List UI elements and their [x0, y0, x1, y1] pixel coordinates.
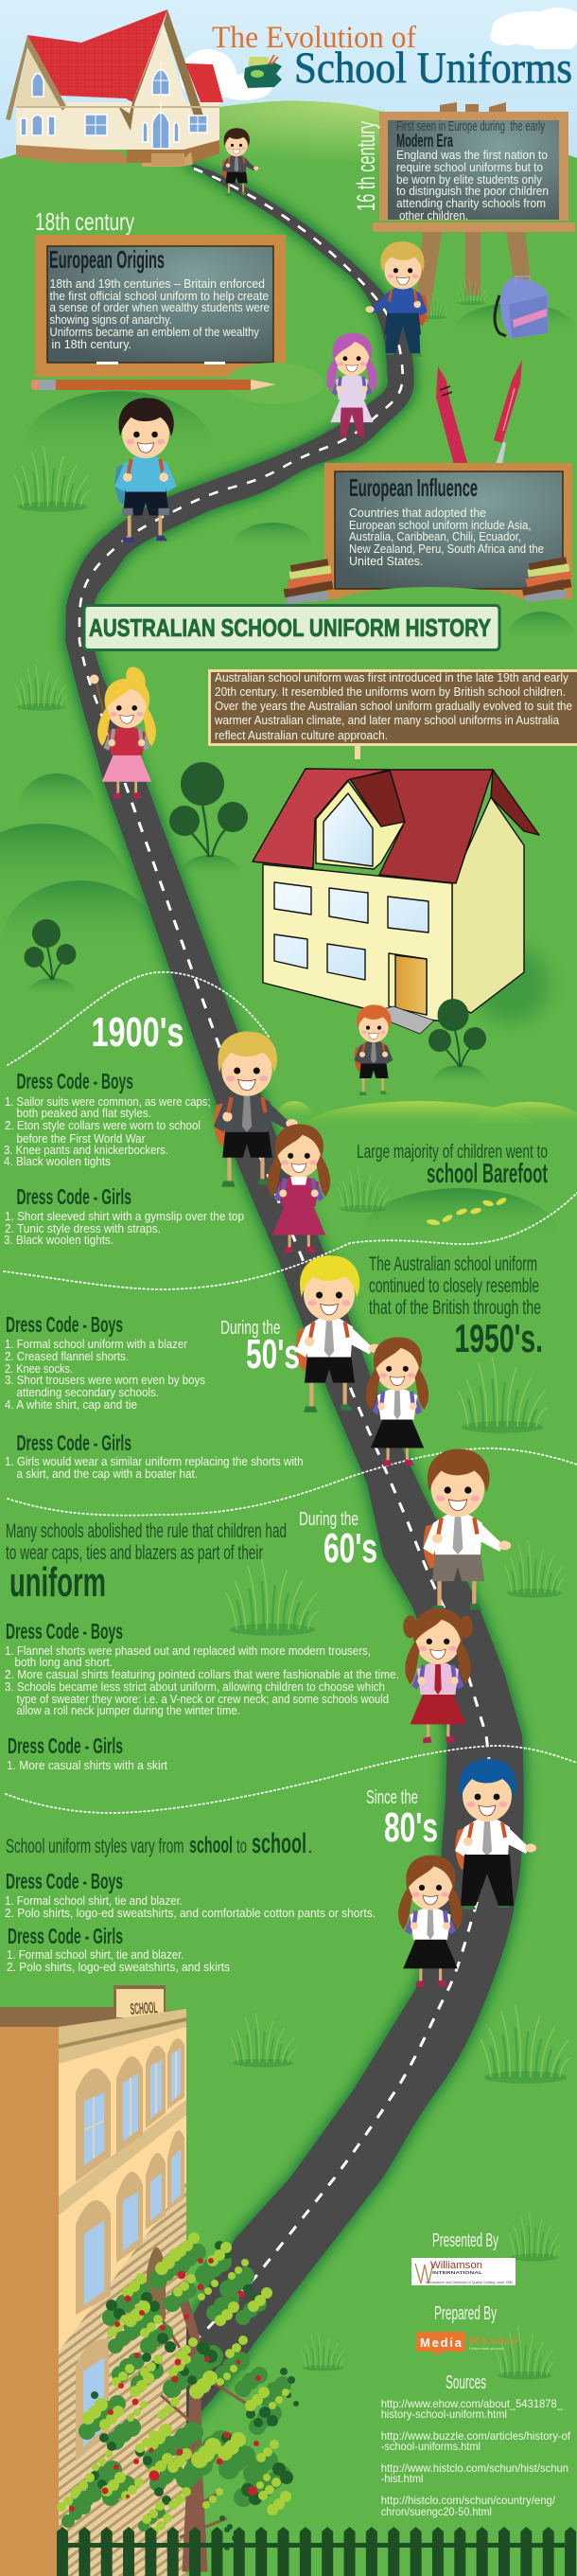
right wall: [452, 797, 524, 1013]
heading: Dress Code - Boys: [6, 1869, 123, 1893]
1900s girls dress code: [4, 1184, 244, 1247]
easel clips: [440, 102, 506, 112]
prepared by: Prepared By: [434, 2303, 497, 2324]
1980s boys dress code: [5, 1869, 376, 1920]
hills: [0, 303, 577, 1283]
list: 2. More casual shirts featuring pointed collars that were fashionable at the time.: [5, 1668, 399, 1681]
era 60s: [299, 1509, 377, 1572]
list: 3. Short trousers were worn even by boys: [5, 1374, 205, 1387]
red apples: [69, 2258, 261, 2512]
heading: Dress Code - Boys: [17, 1069, 133, 1093]
picket fence: [57, 2527, 577, 2576]
list: [4, 1210, 244, 1247]
side wall: [0, 2027, 59, 2576]
list: type of sweater they wore: i.e. a V-neck or crew neck; and some schools would: [17, 1693, 389, 1706]
era 60s: During the: [299, 1509, 358, 1530]
era 80s: [366, 1787, 438, 1851]
board text: New Zealand, Peru, South Africa and the: [349, 542, 544, 556]
windows lower row: [76, 2247, 166, 2461]
hill crest highlight: [189, 101, 577, 170]
logo: media mosaic: Media: [420, 2336, 463, 2350]
1980s callout: .: [307, 1836, 313, 1857]
sources list: chron/suengc20-50.html: [381, 2505, 492, 2518]
board heading: European Origins: [49, 245, 165, 274]
school house at top: [6, 9, 223, 167]
windows middle row: [76, 2130, 184, 2315]
board text: the first official school uniform to help create: [49, 290, 269, 303]
era 50s: During the: [220, 1318, 280, 1339]
era 50s: 50's: [246, 1331, 300, 1377]
dotted era divider lines: [4, 972, 577, 1813]
list: 1. Formal school shirt, tie and blazer.: [5, 1894, 183, 1908]
kid: small boy on path: [222, 128, 258, 196]
board text: Modern Era: [396, 132, 453, 151]
board text: European school uniform include Asia,: [349, 519, 532, 532]
board text: 18th and 19th centuries – Britain enforced: [49, 277, 265, 291]
icon: books right: [522, 557, 571, 602]
floor band: [59, 2100, 186, 2215]
sky background: [0, 0, 577, 180]
1960s boys dress code: [5, 1619, 399, 1717]
roof strip: [0, 2007, 186, 2027]
mound over board base: [331, 587, 530, 625]
sources list: history-school-uniform.html: [381, 2407, 507, 2421]
heading: Dress Code - Girls: [8, 1924, 123, 1948]
right roof: [379, 770, 493, 883]
1960s girls dress code: [7, 1733, 167, 1772]
logo: williamson international: Manufacturer and Distributor of Quality Clothing, since 1980: [426, 2281, 513, 2284]
1980s callout: School uniform styles vary from: [6, 1836, 184, 1857]
list item: 1. More casual shirts with a skirt: [7, 1759, 167, 1772]
list: [5, 1338, 205, 1412]
road shadow: [57, 161, 524, 2480]
1980s callout: school: [189, 1833, 233, 1858]
board heading: European Influence: [349, 473, 478, 502]
school sign: [114, 1985, 166, 2018]
icon: tree three: [428, 999, 486, 1067]
list: before the First World War: [17, 1132, 146, 1146]
icon: pencil: [31, 380, 276, 390]
1900s boys dress code: [4, 1069, 211, 1168]
board text: [396, 118, 549, 222]
1980s callout: school: [252, 1828, 306, 1859]
school sign: SCHOOL: [130, 1999, 158, 2018]
sources list: http://www.buzzle.com/articles/history-of: [381, 2429, 571, 2443]
icon: red pen: [494, 360, 522, 464]
list: 2. Polo shirts, logo-ed sweatshirts, and comfortable cotton pants or shorts.: [5, 1907, 376, 1920]
kid: girl waving with yellow hair: [90, 667, 156, 799]
list: [4, 1095, 211, 1168]
board frame: [324, 463, 572, 599]
list: 1. Formal school uniform with a blazer: [5, 1338, 187, 1351]
heading: Dress Code - Girls: [8, 1733, 123, 1758]
board text: other children.: [399, 209, 468, 222]
icon: backpack on hill: [495, 276, 549, 339]
era 60s: 60's: [323, 1525, 377, 1572]
kid: yellow hair boy in white shirt: [296, 1255, 380, 1412]
list: 3. Knee pants and knickerbockers.: [4, 1144, 168, 1157]
panel: australian history note: 20th century. It resembled the uniforms worn by British school children.: [215, 685, 566, 699]
board text: a sense of order when wealthy students were: [49, 301, 270, 314]
list: 2. Knee socks.: [5, 1362, 73, 1376]
list: 2. Creased flannel shorts.: [5, 1350, 129, 1363]
door: [389, 953, 427, 1015]
list: [5, 1455, 304, 1481]
list: 4. Black woolen tights: [4, 1155, 111, 1168]
list: 1. Girls would wear a similar uniform replacing the shorts with: [5, 1455, 304, 1468]
list: [7, 1948, 230, 1974]
easel legs: [414, 232, 532, 322]
logo: media mosaic: Differentiate yourself: [469, 2347, 503, 2351]
board frame: [379, 112, 568, 221]
logo: williamson international: Williamson: [430, 2260, 482, 2271]
cornice: [59, 2009, 186, 2064]
1960s callout: Many schools abolished the rule that children had: [6, 1520, 287, 1542]
list: 1. Flannel shorts were phased out and replaced with more modern trousers,: [5, 1644, 371, 1658]
road: [57, 161, 524, 2480]
list: 3. Schools became less strict about uniform, allowing children to choose which: [5, 1680, 385, 1694]
board text: attending charity schools from: [396, 197, 546, 210]
panel: modern era easel: [373, 102, 575, 322]
board text: England was the first nation to: [396, 149, 548, 162]
panel: australian history note: [210, 670, 577, 759]
list: 1. Sailor suits were common, as were caps;: [5, 1095, 211, 1109]
18th century label: 18th century: [35, 207, 134, 236]
heading: Dress Code - Boys: [6, 1619, 123, 1643]
kid: blonde boy in hoodie: [214, 1032, 298, 1187]
front wall: [59, 2009, 186, 2576]
panel: australian history note: warmer Australian climate, and later many school uniforms in Australia: [214, 714, 559, 727]
era 80s: Since the: [366, 1787, 418, 1808]
1960s callout: [6, 1520, 287, 1606]
list: 2. Polo shirts, logo-ed sweatshirts, and skirts: [7, 1961, 230, 1974]
icon: tree two: [25, 919, 76, 980]
mound over board corner: [225, 363, 323, 404]
dormer roof: [350, 771, 405, 826]
sources list: -school-uniforms.html: [381, 2440, 481, 2453]
list: 2. Eton style collars were worn to school: [5, 1119, 201, 1132]
sources list: http://histclo.com/schun/country/eng/: [381, 2494, 556, 2507]
doorstep: [378, 1006, 434, 1034]
list: 2. Tunic style dress with straps.: [5, 1222, 161, 1235]
front wall: [263, 864, 452, 1022]
kid: pigtail girl in red skirt: [403, 1608, 473, 1744]
siding: [59, 2182, 186, 2576]
list: both long and short.: [15, 1656, 113, 1669]
era 50s: [220, 1318, 300, 1377]
barefoot callout: [357, 1142, 548, 1189]
logo: media mosaic: Mosaic: [469, 2334, 517, 2347]
icon: red crayon: [436, 366, 467, 465]
board text: Uniforms became an emblem of the wealthy: [49, 326, 260, 339]
list: 3. Black woolen tights.: [4, 1234, 114, 1247]
kid: dark hair boy with cyan shirt: [114, 398, 177, 542]
sources list: http://www.histclo.com/schun/hist/schun: [381, 2461, 568, 2475]
logo: williamson international: INTERNATIONAL: [432, 2270, 482, 2275]
board text: Australia, Caribbean, Chili, Ecuador,: [349, 530, 521, 543]
board text: be worn by elite students only: [396, 173, 543, 187]
1980s callout: [6, 1828, 313, 1859]
kid: girl with tie and black skirt: [398, 1856, 463, 1987]
icon: tree one: [169, 762, 248, 857]
board text: in 18th century.: [51, 338, 131, 351]
board text: Countries that adopted the: [349, 506, 486, 520]
heading: Dress Code - Boys: [6, 1312, 123, 1337]
cloud: top right: [490, 8, 577, 49]
tree with apples: [57, 2232, 299, 2570]
list: 1. Formal school shirt, tie and blazer.: [7, 1948, 184, 1962]
australian house: [253, 769, 539, 1034]
sources list: http://www.ehow.com/about_5431878_: [381, 2397, 563, 2410]
chalk pieces: [96, 362, 225, 364]
list: attending secondary schools.: [17, 1386, 159, 1399]
panel: australian history note: reflect Australian culture approach.: [215, 729, 388, 742]
kid: blonde boy with blue shirt: [365, 241, 428, 356]
house shadow: [473, 947, 549, 1022]
kid: red hair small boy: [355, 1004, 393, 1095]
list: 1. Short sleeved shirt with a gymslip over the top: [5, 1210, 244, 1223]
grass tufts: [14, 277, 570, 2380]
trunk and branches: [156, 2301, 255, 2570]
list: [5, 1644, 399, 1717]
leaf clusters: [57, 2232, 299, 2550]
cloud: behind house: [180, 49, 272, 102]
panel: european influence board: [324, 463, 572, 625]
logo: media mosaic: [416, 2332, 517, 2356]
dormer front: [316, 781, 405, 869]
1950s girls dress code: [5, 1430, 304, 1481]
list: allow a roll neck jumper during the winter time.: [17, 1704, 240, 1717]
school building at bottom: [0, 1985, 186, 2576]
eave: [491, 770, 539, 835]
16th century label: 16 th century: [352, 121, 380, 211]
list: a skirt, and the cap with a boater hat.: [17, 1467, 198, 1481]
list: [5, 1894, 376, 1920]
dormer window: [323, 793, 373, 866]
easel tray: [373, 222, 575, 232]
board text: showing signs of anarchy.: [49, 313, 172, 327]
1980s callout: to: [236, 1836, 247, 1857]
1950s boys dress code: [5, 1312, 205, 1412]
board text: require school uniforms but to: [396, 161, 543, 174]
kid: girl in magenta tunic: [268, 1124, 330, 1253]
panel: australian history note: Australian school uniform was first introduced in the late 19th and early: [215, 671, 569, 684]
kid: girl in black skirt: [366, 1337, 428, 1466]
logo: williamson international: [411, 2258, 516, 2285]
title line one: The Evolution of: [212, 21, 416, 55]
1960s callout: uniform: [9, 1559, 106, 1606]
icon: school backpack: [244, 55, 282, 88]
board text: [49, 277, 270, 351]
kid: blue hair boy: [455, 1759, 536, 1910]
board text: United States.: [349, 555, 424, 568]
1980s girls dress code: [7, 1924, 230, 1974]
1950s callout: [369, 1253, 543, 1360]
board text: to distinguish the poor children: [396, 185, 549, 198]
heading: Dress Code - Girls: [17, 1184, 131, 1209]
kid: brown hair boy with grey shorts: [423, 1449, 511, 1612]
era 80s: 80's: [384, 1804, 438, 1851]
1960s callout: to wear caps, ties and blazers as part of their: [6, 1542, 263, 1564]
sources heading: Sources: [446, 2372, 486, 2393]
board frame: [35, 235, 286, 377]
era 1900s: 1900's: [91, 1009, 184, 1056]
presented by: Presented By: [432, 2230, 498, 2251]
left roof: [253, 769, 390, 868]
board text: [349, 506, 544, 568]
kid: purple hair girl: [326, 333, 377, 437]
list: both peaked and flat styles.: [17, 1107, 151, 1120]
windows upper row: [76, 2038, 184, 2182]
sources list: -hist.html: [381, 2472, 424, 2485]
icon: books left: [284, 559, 333, 604]
panel: european origins board: [35, 235, 286, 377]
list: 4. A white shirt, cap and tie: [5, 1398, 137, 1412]
footprints: [427, 1197, 508, 1226]
title: [212, 21, 572, 93]
sources list: [381, 2397, 571, 2518]
windows: [274, 882, 428, 980]
banner: australian school uniform history: [84, 606, 499, 649]
heading: Dress Code - Girls: [17, 1430, 131, 1455]
